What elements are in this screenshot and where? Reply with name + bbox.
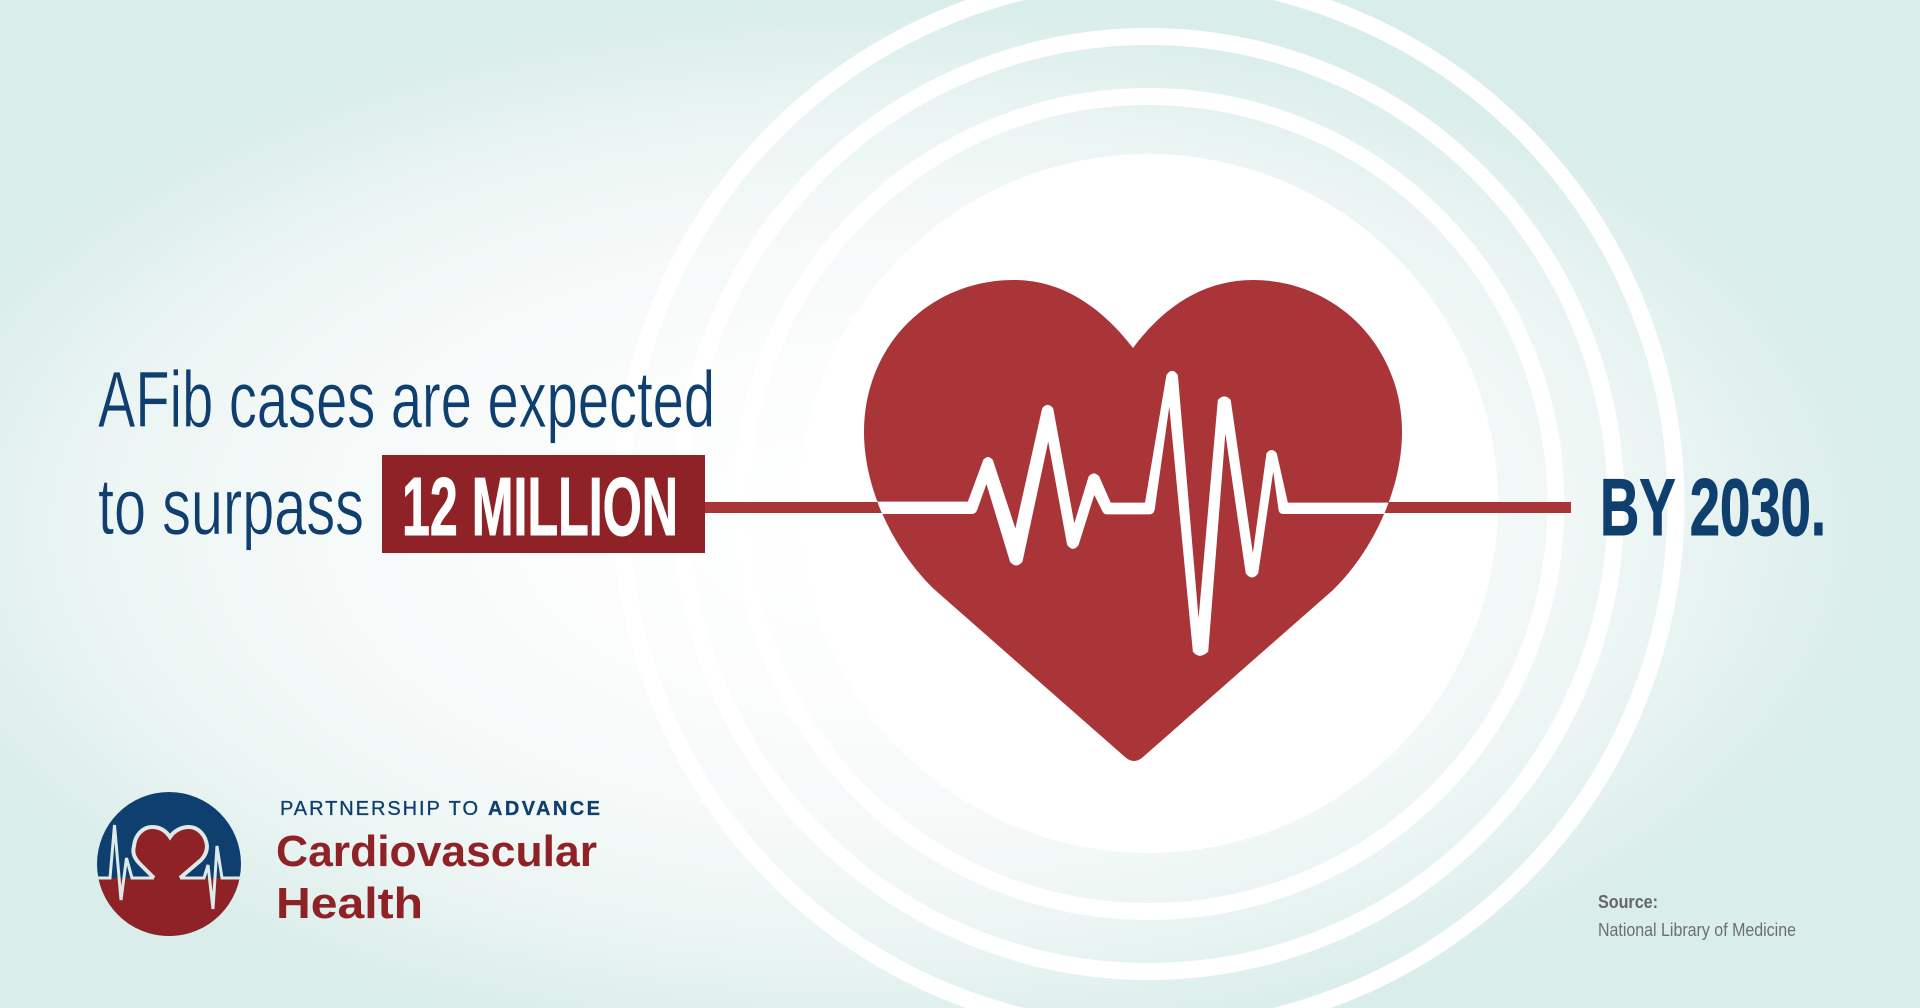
logo text: partnership to advance [280,798,600,820]
headline: second line: to surpass [98,462,364,551]
logo text: partnership to advance: ADVANCE [488,798,600,820]
logo mark [97,792,241,936]
logo text: health: Health [276,879,423,928]
logo [97,792,600,936]
highlight box: 12 million: 12 MILLION [402,460,678,553]
source note [1598,892,1796,940]
highlight box: 12 million [382,455,705,553]
headline: first line: AFib cases are expected [98,355,715,444]
icon: heart with heartbeat [864,280,1402,761]
logo text: cardiovascular: Cardiovascular [276,827,597,876]
heartbeat line [877,371,1389,656]
source note: Source: [1598,892,1658,912]
concentric pulse rings [621,0,1676,1008]
connector line behind heart [705,502,1571,513]
logo text: partnership to advance: PARTNERSHIP TO [280,798,478,820]
source note: National Library of Medicine [1598,920,1796,940]
heart shape [864,280,1402,761]
